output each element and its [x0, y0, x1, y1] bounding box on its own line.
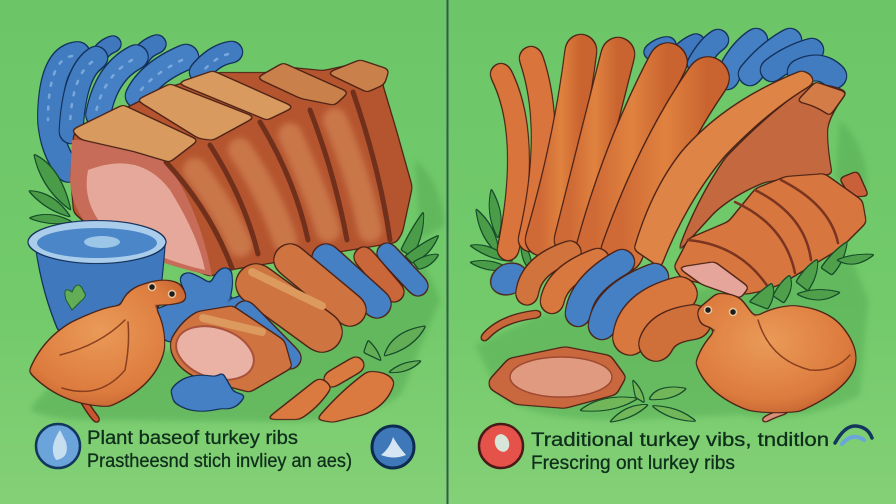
roast segment shading — [195, 120, 370, 245]
icon: blue cup — [27, 220, 167, 345]
divider — [446, 0, 448, 504]
sliced roll — [169, 253, 418, 393]
icon: herbs under roast — [748, 240, 876, 310]
icon: blue swirl badge — [36, 424, 80, 468]
caption: traditional — [479, 424, 872, 474]
sausage highlights — [48, 54, 228, 125]
icon: left bird — [28, 280, 187, 420]
caption text — [87, 427, 352, 472]
icon: blue small piece — [170, 372, 246, 412]
roll segments — [170, 253, 418, 393]
caption text: Traditional turkey vibs, tnditlon — [531, 429, 829, 451]
roast cut face — [70, 140, 212, 276]
icon: blue plant-based sausages — [50, 44, 232, 170]
icon: blue arc badge — [835, 426, 872, 444]
caption text — [531, 429, 829, 474]
icon: red badge — [479, 424, 523, 468]
big back roast — [633, 70, 848, 269]
roast body — [70, 62, 413, 277]
roast slice lines — [688, 180, 838, 287]
icon: left herbs — [468, 187, 532, 272]
icon: blue flower badge — [372, 426, 414, 468]
wing line — [758, 320, 850, 370]
wing line — [60, 320, 129, 391]
panel: traditional — [468, 40, 876, 474]
icon: blue sausages behind — [652, 40, 834, 78]
caption text: Prastheesnd stich invliey an aes) — [87, 450, 352, 472]
icon: slice on plate — [488, 346, 627, 409]
icon: leaves bottom — [578, 378, 698, 423]
ground shadow — [30, 160, 445, 422]
icon: right bird — [695, 293, 857, 420]
front ribs row — [484, 252, 694, 344]
caption text: Plant baseof turkey ribs — [87, 427, 298, 449]
roast crust tiles — [70, 59, 390, 163]
icon: blue piece behind bird — [150, 267, 265, 343]
right bird eyes — [704, 306, 736, 316]
ground shadow — [475, 120, 868, 420]
roll cut face — [169, 317, 261, 389]
icon: leaves behind roast — [27, 153, 440, 270]
bird eyes — [148, 284, 176, 298]
standing ribs — [501, 50, 708, 252]
roll crust highlights — [203, 272, 322, 332]
roast gaps — [166, 92, 390, 268]
cut roast right — [673, 170, 870, 299]
panel: plant-based — [27, 44, 445, 472]
caption text: Frescring ont lurkey ribs — [531, 452, 735, 474]
big roast — [70, 59, 413, 277]
icon: carrots and leaves — [264, 325, 427, 423]
caption: plant-based — [36, 424, 414, 472]
